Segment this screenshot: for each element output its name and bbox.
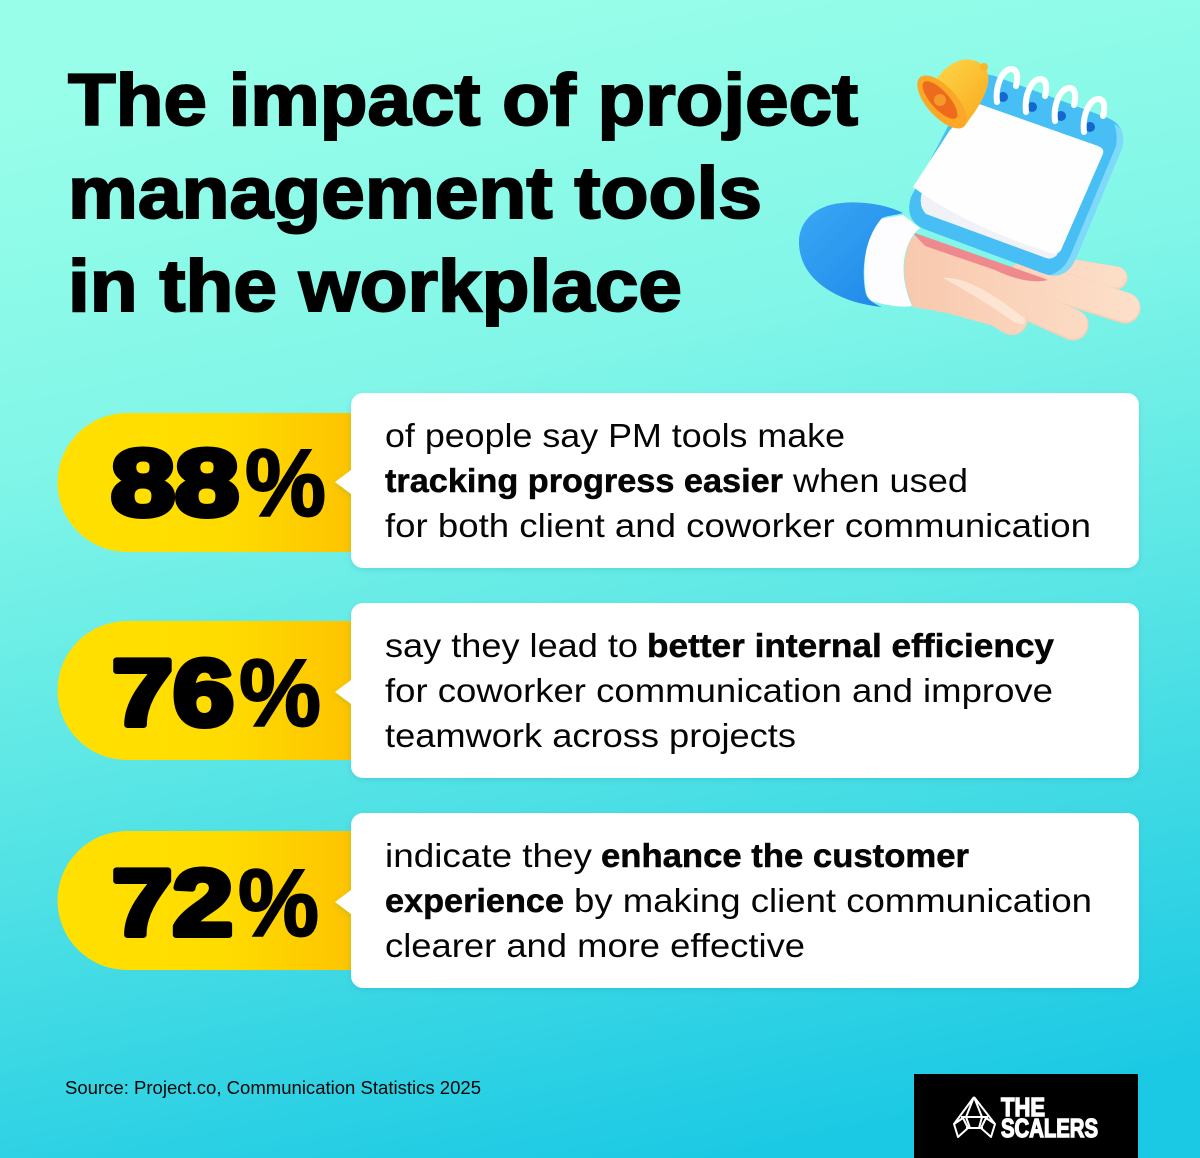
value: 88%: 88 [111, 430, 239, 535]
pill: 72% [58, 831, 360, 970]
card 3 text: by making client communication [574, 882, 1092, 919]
hand [955, 265, 1125, 325]
paper [913, 104, 1103, 254]
card 1 text: for both client and coworker communication [385, 507, 1091, 544]
value: 72% [112, 850, 319, 957]
card 1 text: tracking progress easier [385, 462, 783, 499]
card 3 text: enhance the customer [601, 837, 969, 874]
logo: The Scalers [914, 1074, 1138, 1158]
rings [998, 92, 1095, 132]
logo: The Scalers: SCALERS [1001, 1113, 1098, 1143]
illustration: hand holding calendar with bell [799, 59, 1125, 325]
card 2 text: teamwork across projects [385, 717, 796, 754]
card 3 text: clearer and more effective [385, 927, 805, 964]
title: management tools [68, 153, 762, 234]
value: 88%: % [245, 430, 326, 537]
title [68, 60, 858, 327]
card 3 [335, 813, 1139, 988]
icon: diamond [954, 1097, 995, 1137]
value: 72%: 72 [112, 850, 233, 955]
lower sheet [921, 192, 1060, 259]
pill: 88% [58, 413, 360, 552]
stat row 1 [58, 393, 1139, 568]
source note: Source: Project.co, Communication Statistics 2025 [65, 1078, 481, 1098]
bell [932, 59, 988, 124]
card 2 text [385, 627, 1055, 754]
card 1 text: of people say PM tools make [385, 417, 845, 454]
value: 76%: % [239, 640, 321, 747]
wordmark: THE [1001, 1092, 1045, 1122]
sleeve [799, 202, 903, 307]
value: 88% [111, 430, 326, 537]
card 1 text: when used [792, 462, 968, 499]
card 3 text: experience [385, 882, 564, 919]
card 2 [335, 603, 1139, 778]
cuff [864, 215, 920, 307]
title: in the workplace [68, 246, 682, 327]
shadow under calendar [912, 232, 1048, 281]
card 2 text: better internal efficiency [647, 627, 1055, 664]
pill: 76% [58, 621, 360, 760]
value: 76% [112, 640, 321, 747]
value: 72%: % [238, 850, 319, 957]
title: The impact of project [68, 60, 858, 141]
card 1 [335, 393, 1139, 568]
card 2 text: for coworker communication and improve [385, 672, 1053, 709]
value: 76%: 76 [112, 640, 234, 745]
card 3 text: indicate they [385, 837, 593, 874]
calendar back [909, 75, 1123, 275]
stat row 2 [58, 603, 1139, 778]
card 1 text [385, 417, 1091, 544]
stat row 3 [58, 813, 1139, 988]
card 3 text [385, 837, 1092, 964]
card 2 text: say they lead to [385, 627, 638, 664]
